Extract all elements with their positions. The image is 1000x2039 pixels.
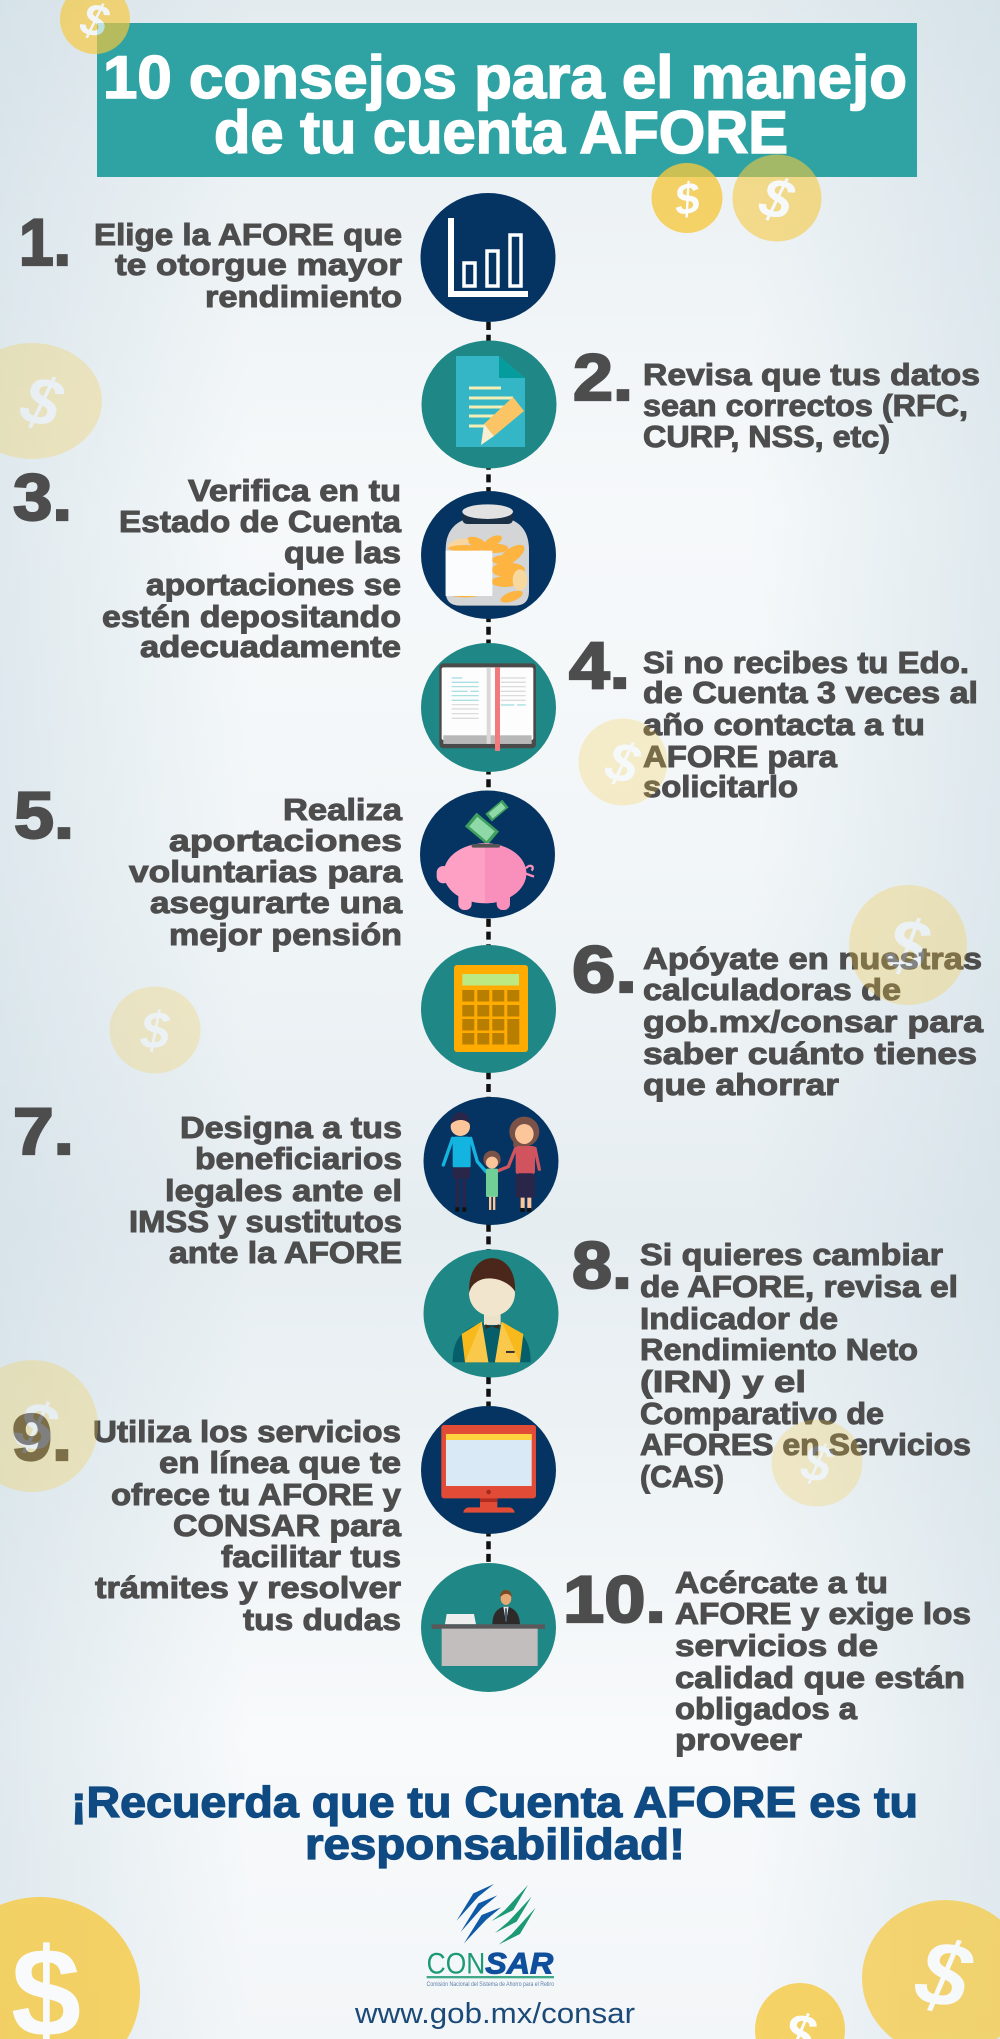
tip 10 text: Acércate a tu (675, 1566, 888, 1600)
coin: left upper (0, 343, 102, 459)
title banner (97, 23, 917, 177)
logo wordmark: Comisión Nacional del Sistema de Ahorro para el Retiro (427, 1981, 554, 1988)
tip 8 text: Comparativo de (640, 1397, 884, 1431)
tip 8 text: de AFORE, revisa el (640, 1270, 958, 1304)
tip 1 text: te otorgue mayor (115, 248, 402, 282)
number 7: 7. (13, 1094, 74, 1168)
number 6: 6. (572, 932, 637, 1006)
tip 5 text: aportaciones (169, 824, 402, 858)
coin: left middle (110, 986, 200, 1074)
coin: title right small (652, 163, 722, 233)
tip 4 text: de Cuenta 3 veces al (643, 676, 978, 710)
tip 10 text: AFORE y exige los (675, 1597, 971, 1631)
tip 4 text: Si no recibes tu Edo. (643, 646, 969, 680)
number 2: 2. (573, 340, 633, 414)
icon: piggy bank (420, 790, 555, 918)
icon: open book (421, 643, 556, 772)
number 10: 10. (563, 1562, 666, 1636)
tip 3 text: Verifica en tu (188, 474, 401, 508)
tip 2 (422, 340, 980, 468)
coin: bottom left large (0, 1897, 140, 2039)
closing message (71, 1778, 918, 1869)
number 9: 9. (12, 1400, 72, 1474)
tip 6 text: Apóyate en nuestras (643, 942, 982, 976)
tip 9 (12, 1400, 556, 1637)
logo mark: green strokes (492, 1885, 536, 1945)
tip 10 text (675, 1566, 971, 1757)
tip 10 text: obligados a (675, 1692, 858, 1726)
logo wordmark (427, 1947, 554, 1988)
tip 9 text (93, 1415, 402, 1637)
tip 7 text: IMSS y sustitutos (129, 1205, 402, 1239)
tip 5 text (129, 793, 403, 952)
tip 5 (14, 778, 555, 952)
coin: bottom right large (862, 1900, 1000, 2039)
tip 2 text: sean correctos (RFC, (643, 389, 968, 423)
tip 2 text: CURP, NSS, etc) (643, 420, 890, 454)
tip 9 text: Utiliza los servicios (93, 1415, 401, 1449)
tip 9 text: tus dudas (243, 1603, 401, 1637)
tip 1 text: rendimiento (205, 280, 402, 314)
tip 8 text: Indicador de (640, 1302, 838, 1336)
title text: 10 consejos para el manejo (103, 44, 907, 111)
coin: left middle: $ (140, 1002, 171, 1060)
coin: title right small: $ (671, 173, 703, 226)
tip 7 text: Designa a tus (180, 1111, 402, 1145)
tip 8 (424, 1228, 971, 1494)
coin: top left (60, 0, 130, 54)
tip 3 (13, 460, 556, 664)
tip 4 text: solicitarlo (643, 770, 798, 804)
number 1: 1. (19, 205, 71, 279)
tip 6 text: que ahorrar (643, 1068, 839, 1102)
icon: document and pencil (422, 340, 556, 468)
logo wordmark: SAR (485, 1947, 553, 1980)
tip 6 text: calculadoras de (643, 973, 901, 1007)
coin: right lower (772, 1420, 862, 1506)
tip 1 (19, 193, 556, 322)
tip 2 text: Revisa que tus datos (643, 358, 980, 392)
icon: bar chart (420, 193, 556, 322)
tip 1 text: Elige la AFORE que (94, 218, 402, 252)
tip 1 text (94, 218, 402, 314)
CONSAR logo (427, 1884, 554, 1988)
coin: right middle (849, 885, 967, 1005)
icon: reception desk (421, 1563, 556, 1692)
tip 5 text: Realiza (283, 793, 403, 827)
tip 4 text: año contacta a tu (643, 708, 925, 742)
tip 8 text: Rendimiento Neto (640, 1333, 918, 1367)
coin: left lower: $ (7, 1385, 65, 1469)
tip 7 text: beneficiarios (195, 1142, 402, 1176)
tip 3 text: aportaciones se (146, 568, 401, 602)
tip 8 text: Si quieres cambiar (640, 1238, 943, 1272)
tip 9 text: en línea que te (159, 1446, 401, 1480)
tip 10 text: calidad que están (675, 1661, 965, 1695)
closing message: ¡Recuerda que tu Cuenta AFORE es tu (71, 1778, 918, 1827)
tip 3 text: estén depositando (102, 600, 401, 634)
coin: center right (578, 718, 668, 806)
tip 4 text (643, 646, 978, 804)
tip 6 (421, 932, 984, 1102)
tip 6 text: saber cuánto tienes (643, 1037, 977, 1071)
tip 7 text (129, 1111, 402, 1270)
icon: family (424, 1097, 558, 1225)
title text (103, 44, 907, 166)
dotted connector (486, 322, 491, 1565)
tip 6 text: gob.mx/consar para (643, 1005, 984, 1039)
tip 5 text: asegurarte una (150, 886, 403, 920)
tip 10 text: proveer (675, 1723, 802, 1757)
tip 2 text (643, 358, 980, 454)
coin: left upper: $ (13, 360, 71, 444)
closing message: responsabilidad! (305, 1820, 685, 1869)
tip 8 text (640, 1238, 971, 1494)
coin: bottom center small (755, 1983, 845, 2039)
tip 7 (13, 1094, 558, 1270)
tip 5 text: mejor pensión (169, 918, 402, 952)
tip 10 text: servicios de (675, 1629, 878, 1663)
tip 4 (421, 628, 978, 804)
title text: de tu cuenta AFORE (214, 99, 788, 166)
tip 3 text (102, 474, 402, 664)
coin: bottom right large: $ (907, 1920, 980, 2030)
icon: calculator (421, 945, 556, 1073)
coin: right middle: $ (880, 903, 935, 989)
coin: center right: $ (599, 728, 647, 797)
number 5: 5. (14, 778, 74, 852)
tip 7 text: ante la AFORE (169, 1236, 402, 1270)
icon: computer monitor (421, 1406, 556, 1534)
coin: right lower: $ (796, 1432, 838, 1496)
tip 3 text: adecuadamente (140, 630, 401, 664)
icon: service agent (424, 1250, 558, 1378)
website URL: www.gob.mx/consar (354, 1998, 635, 2030)
coin: title right large (732, 154, 822, 242)
tip 6 text (643, 942, 984, 1102)
number 4: 4. (569, 628, 630, 702)
number 3: 3. (13, 460, 72, 534)
tip 8 text: (CAS) (640, 1460, 724, 1494)
coin: title right large: $ (753, 164, 801, 233)
tip 9 text: trámites y resolver (95, 1571, 401, 1605)
tip 9 text: CONSAR para (173, 1509, 402, 1543)
tip 5 text: voluntarias para (129, 855, 403, 889)
logo mark: blue strokes (457, 1884, 501, 1943)
tip 3 text: Estado de Cuenta (119, 505, 402, 539)
tip 7 text: legales ante el (165, 1174, 402, 1208)
coin: left lower (0, 1360, 98, 1492)
tip 9 text: ofrece tu AFORE y (111, 1478, 401, 1512)
number 8: 8. (572, 1228, 632, 1302)
logo wordmark: CON (427, 1947, 485, 1980)
tip 8 text: (IRN) y el (640, 1365, 806, 1399)
tip 10 (421, 1562, 971, 1757)
tip 3 text: que las (284, 536, 401, 570)
tip 4 text: AFORE para (643, 740, 838, 774)
tip 8 text: AFORES en Servicios (640, 1428, 971, 1462)
icon: coin jar (421, 491, 556, 619)
tip 9 text: facilitar tus (221, 1540, 401, 1574)
